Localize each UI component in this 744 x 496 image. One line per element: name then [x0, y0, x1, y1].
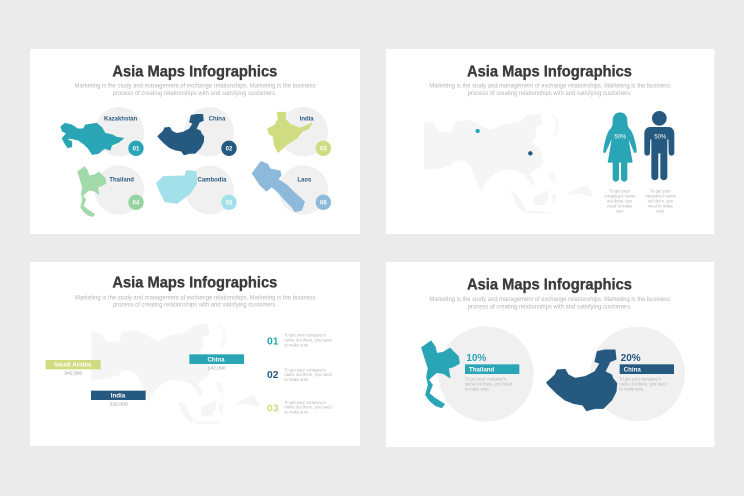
- China block: name out there, you need: [619, 381, 667, 386]
- subtitle: process of creating relationships with and satisfying customers.: [468, 90, 632, 97]
- China block: China: [624, 366, 641, 373]
- China block: 20%: [621, 353, 641, 364]
- country: Thailand: [78, 165, 144, 217]
- Thailand block: name out there, you need: [465, 381, 513, 386]
- list item 03: [267, 400, 332, 415]
- text block: male caption: sure: [656, 208, 665, 213]
- text block: female caption: To get your: [609, 189, 631, 194]
- icon: male figure 50%: 50%: [654, 134, 667, 140]
- country: India: India: [300, 116, 314, 122]
- subtitle: [75, 83, 316, 97]
- label: Saudi Arabia: Saudi Arabia: [54, 362, 92, 369]
- list item 03: name out there, you need: [284, 405, 332, 410]
- label: China: China: [207, 356, 225, 363]
- title: Asia Maps Infographics: [112, 275, 277, 292]
- subtitle: process of creating relationships with and satisfying customers.: [113, 90, 277, 97]
- country: India: [268, 107, 331, 156]
- country: Kazakhstan: [61, 107, 144, 156]
- text block: female caption: need to make: [607, 203, 633, 208]
- country: Laos: [252, 162, 331, 215]
- label: India: 232,000: [110, 401, 128, 407]
- subtitle: process of creating relationships with and satisfying customers.: [113, 302, 277, 309]
- country: India: 03: [320, 146, 327, 152]
- country: Thailand: 04: [133, 200, 140, 206]
- title: Asia Maps Infographics: [112, 63, 277, 80]
- text block: female caption: company's name: [604, 194, 636, 199]
- list item 02: name out there, you need: [284, 372, 332, 377]
- subtitle: [429, 83, 671, 97]
- list item 03: to make sure.: [284, 410, 310, 415]
- text block: male caption: out there, you: [648, 198, 674, 203]
- text block: male caption: [645, 189, 677, 213]
- country: China: 02: [226, 146, 233, 152]
- list item 01: [267, 333, 332, 348]
- list item 02: to make sure.: [284, 377, 310, 382]
- country: China: China: [209, 116, 226, 122]
- list item 02: 02: [267, 370, 279, 381]
- list item 03: To get your company's: [284, 400, 326, 405]
- text block: female caption: [604, 189, 636, 213]
- text block: male caption: company's name: [645, 194, 677, 199]
- Thailand block: [422, 326, 534, 422]
- subtitle: Marketing is the study and management of exchange relationships. Marketing is the business: [429, 296, 671, 303]
- China block: to make sure.: [619, 386, 645, 391]
- text block: male caption: need to make: [648, 203, 674, 208]
- country: Laos: Laos: [297, 178, 312, 184]
- country: Kazakhstan: Kazakhstan: [104, 116, 138, 122]
- subtitle: Marketing is the study and management of exchange relationships. Marketing is the business: [429, 83, 671, 90]
- Thailand block: Thailand: [469, 366, 495, 373]
- title: Asia Maps Infographics: [467, 63, 632, 80]
- panel: six country maps: [30, 49, 360, 234]
- label: China: 142,000: [208, 365, 226, 371]
- map marker: navy: [528, 151, 532, 155]
- icon: female figure 50%: [603, 112, 637, 182]
- label: India: India: [111, 392, 126, 399]
- list item 02: [267, 367, 332, 382]
- map marker: teal: [475, 129, 480, 133]
- list item 01: To get your company's: [284, 333, 326, 338]
- icon: male figure 50%: [644, 111, 674, 180]
- panel: Thailand and China percentages: [386, 262, 714, 447]
- label: Saudi Arabia: [46, 360, 101, 376]
- list item 02: To get your company's: [284, 367, 326, 372]
- country: Kazakhstan: 01: [133, 146, 140, 152]
- Thailand block: to make sure.: [465, 386, 490, 391]
- Thailand block: To get your company's: [465, 377, 506, 382]
- list item 01: 01: [267, 337, 279, 348]
- subtitle: [75, 294, 316, 309]
- list item 01: to make sure.: [284, 342, 310, 347]
- panel: gender split map: [386, 49, 714, 234]
- subtitle: process of creating relationships with and satisfying customers.: [468, 303, 632, 310]
- country: Laos: 06: [320, 200, 327, 206]
- icon: female figure 50%: 50%: [614, 134, 627, 140]
- country: Thailand: Thailand: [109, 178, 134, 184]
- Asia map: [424, 112, 592, 213]
- country: Cambodia: [157, 166, 237, 214]
- China block: To get your company's: [619, 377, 661, 382]
- China block: [547, 327, 685, 421]
- Thailand block: 10%: [466, 353, 486, 364]
- text block: male caption: To get your: [650, 189, 671, 194]
- country: Cambodia: 05: [226, 200, 233, 206]
- text block: female caption: sure: [616, 208, 624, 213]
- list item 01: name out there, you need: [284, 337, 332, 342]
- label: Saudi Arabia: 342,000: [64, 370, 83, 376]
- country: China: [158, 107, 237, 156]
- text block: female caption: out there, you: [607, 198, 633, 203]
- list item 03: 03: [267, 403, 279, 414]
- subtitle: Marketing is the study and management of exchange relationships. Marketing is the business: [75, 294, 316, 301]
- title: Asia Maps Infographics: [467, 277, 632, 294]
- subtitle: [429, 296, 671, 310]
- panel: labelled map with numbered list: [30, 262, 360, 446]
- label: India: [91, 391, 146, 407]
- Asia map: [91, 322, 259, 424]
- subtitle: Marketing is the study and management of exchange relationships. Marketing is the business: [75, 83, 316, 90]
- label: China: [189, 354, 244, 371]
- country: Cambodia: Cambodia: [198, 178, 227, 184]
